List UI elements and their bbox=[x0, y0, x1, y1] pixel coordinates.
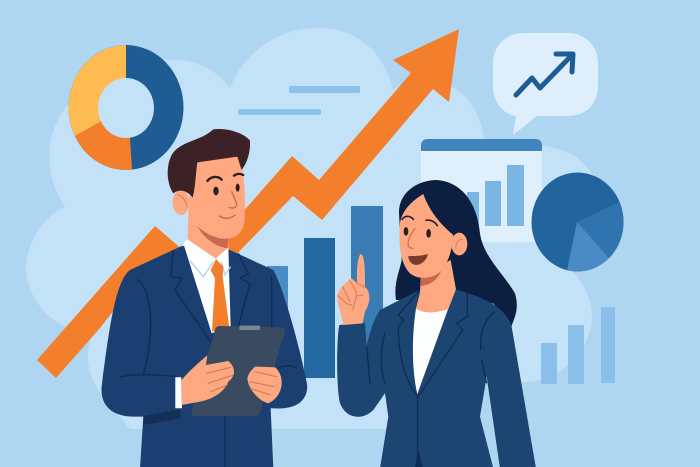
woman mouth bbox=[408, 254, 428, 265]
man cuff bbox=[175, 377, 182, 408]
clipboard bbox=[191, 326, 285, 416]
bar chart: center blue bars bbox=[267, 206, 383, 378]
woman shirt bbox=[413, 308, 448, 394]
woman eyebrows bbox=[402, 216, 437, 226]
man ear detail bbox=[177, 195, 187, 207]
bar chart: right pale bars bbox=[541, 307, 615, 384]
arrow: orange growth arrow bbox=[37, 29, 459, 378]
woman face bbox=[399, 194, 453, 278]
cloud backdrop bbox=[26, 28, 600, 429]
woman raised hand bbox=[337, 254, 369, 325]
man nose and mouth bbox=[219, 192, 237, 218]
woman neck bbox=[416, 260, 456, 312]
man neck shadow bbox=[197, 226, 228, 248]
man finger lines bbox=[207, 367, 277, 395]
woman jacket bbox=[337, 289, 536, 467]
woman nose bbox=[408, 228, 415, 248]
donut chart bbox=[68, 45, 184, 170]
woman eyes bbox=[404, 227, 431, 238]
woman ear bbox=[451, 233, 467, 255]
man left hand bbox=[182, 355, 234, 405]
man right hand bbox=[247, 367, 282, 403]
text placeholder lines bbox=[238, 86, 360, 115]
woman hair bbox=[395, 180, 517, 326]
woman finger lines bbox=[338, 280, 365, 310]
man ear bbox=[173, 190, 189, 215]
man tie bbox=[211, 259, 229, 332]
woman jacket lines bbox=[367, 291, 495, 467]
man eyes bbox=[213, 184, 240, 195]
dashboard panel with bars bbox=[421, 139, 542, 242]
man hair bbox=[168, 129, 250, 198]
woman in blazer pointing up bbox=[337, 180, 536, 467]
woman ear detail bbox=[456, 239, 463, 249]
man face bbox=[188, 155, 245, 239]
man eyebrows bbox=[207, 174, 243, 181]
woman jacket hem shadow bbox=[415, 448, 423, 467]
speech bubble with trend arrow bbox=[493, 33, 598, 135]
man jacket lines bbox=[119, 251, 297, 467]
man shirt bbox=[183, 239, 231, 333]
man collar edge bbox=[190, 261, 231, 277]
man in suit with clipboard bbox=[102, 129, 307, 467]
man jacket shadow bbox=[143, 409, 181, 425]
woman neck shadow bbox=[421, 269, 442, 286]
man neck bbox=[188, 213, 229, 259]
man jacket bbox=[102, 246, 307, 467]
pie chart bbox=[532, 172, 624, 272]
